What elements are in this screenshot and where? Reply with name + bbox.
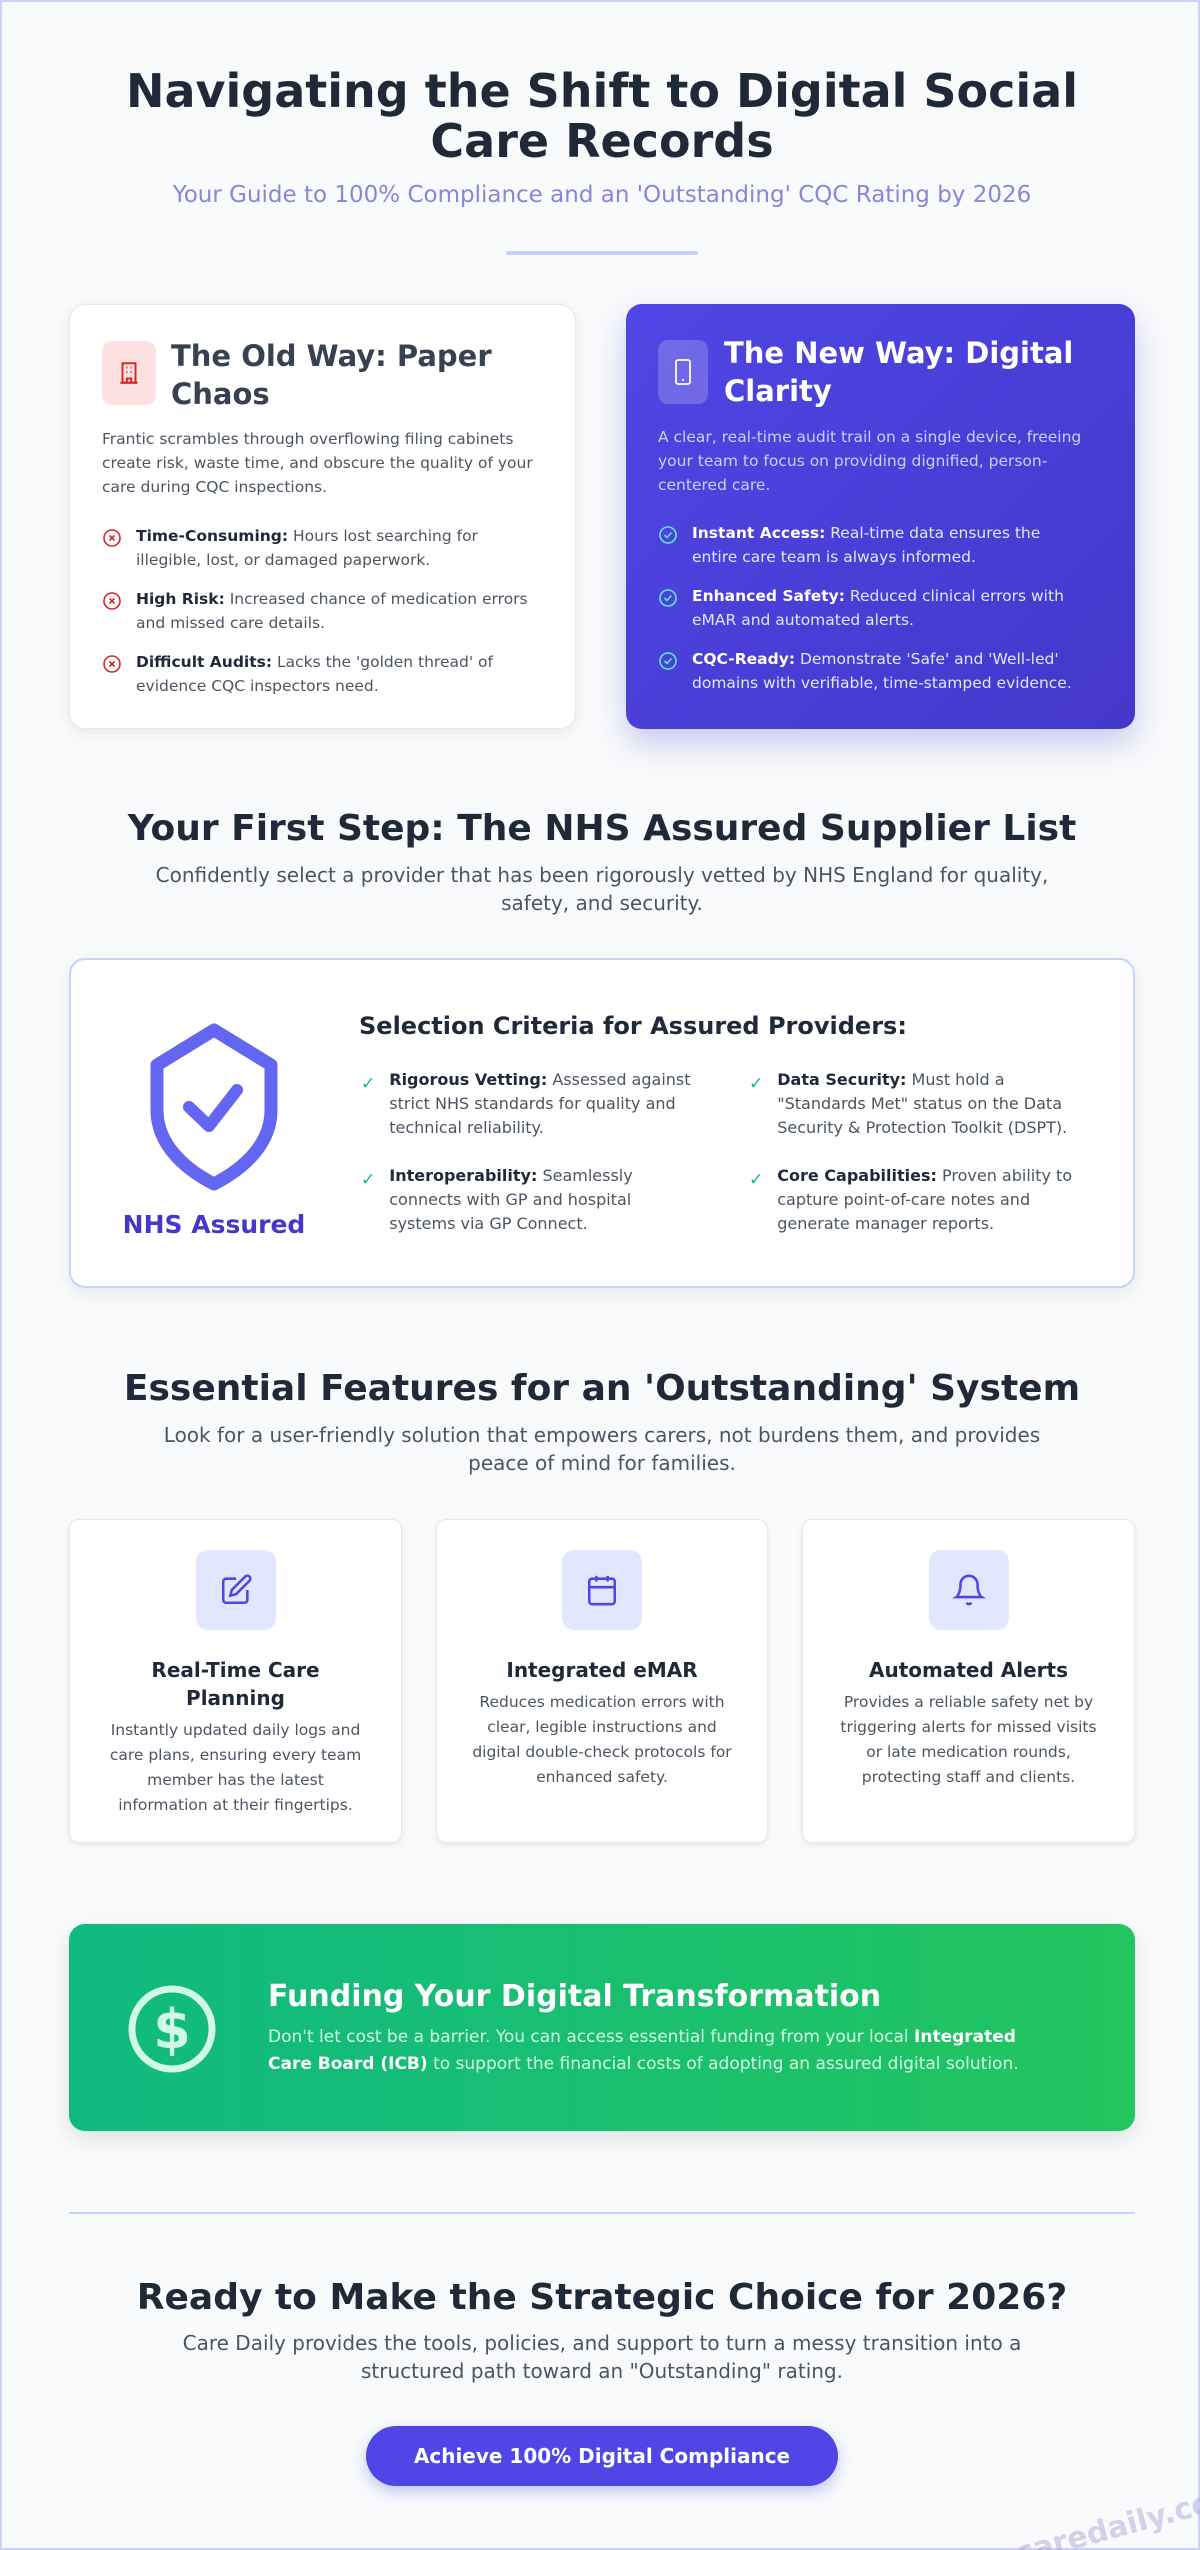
criteria grid: Rigorous Vetting: Assessed against strict NHS standards for quality and technical reliability. <box>389 1070 691 1137</box>
text: first step subtitle: Confidently select a provider that has been rigorously vetted by NHS England for quality, safety, and security. <box>156 863 1048 915</box>
list: old way problems: High Risk: Increased chance of medication errors and missed care details. <box>136 590 528 632</box>
icon: building <box>102 341 156 405</box>
criteria grid: Data Security: Must hold a "Standards Met" status on the Data Security & Protection Toolkit (DSPT). <box>777 1070 1067 1137</box>
text: old way description: Frantic scrambles through overflowing filing cabinets create risk, waste time, and obscure the quality of your care during CQC inspections. <box>102 430 533 496</box>
criteria grid <box>361 1070 1072 1233</box>
heading: old way: The Old Way: Paper Chaos <box>171 339 492 411</box>
feature card: automated alerts: Automated Alerts <box>869 1658 1068 1682</box>
list: old way problems: Difficult Audits: Lacks the 'golden thread' of <box>136 653 493 671</box>
subtitle: Your Guide to 100% Compliance and an 'Outstanding' CQC Rating by 2026 <box>173 182 1031 208</box>
heading: essential features: Essential Features for an 'Outstanding' System <box>124 1368 1080 1409</box>
icon: dollar: $ <box>153 1998 191 2061</box>
criteria grid: ✓ <box>361 1170 375 1190</box>
button: cta: Achieve 100% Digital Compliance <box>414 2444 790 2468</box>
panel: new way <box>626 304 1135 729</box>
list: new way benefits <box>659 524 1072 692</box>
text: funding: Don't let cost be a barrier. You can access essential funding from your local Integrated <box>268 2027 1016 2047</box>
heading: funding: Funding Your Digital Transformation <box>268 1979 881 2014</box>
text: funding: Care Board (ICB) to support the financial costs of adopting an assured digital solution. <box>268 2054 1019 2074</box>
feature card: automated alerts: Provides a reliable safety net by triggering alerts for missed visits or late medication rounds, protecting staff and clients. <box>840 1693 1097 1786</box>
text: features subtitle: Look for a user-friendly solution that empowers carers, not burdens them, and provides peace of mind for families. <box>164 1423 1040 1475</box>
icon: shield <box>150 1023 278 1190</box>
panel: old way <box>69 304 576 729</box>
label: NHS Assured: NHS Assured <box>123 1210 305 1239</box>
criteria grid: ✓ <box>749 1170 763 1190</box>
criteria grid: Core Capabilities: Proven ability to capture point-of-care notes and generate manager reports. <box>777 1166 1072 1233</box>
text: new way description: A clear, real-time audit trail on a single device, freeing your team to focus on providing dignified, person-centered care. <box>658 428 1081 494</box>
list: new way benefits: eMAR and automated alerts. <box>692 611 914 629</box>
text: cta description: Care Daily provides the tools, policies, and support to turn a messy transition into a structured path toward an "Outstanding" rating. <box>183 2331 1021 2383</box>
feature card: real-time care planning <box>69 1519 402 1843</box>
feature card: integrated eMAR: Reduces medication errors with clear, legible instructions and digital double-check protocols for enhanced safety. <box>472 1693 732 1786</box>
feature card: real-time care planning: Real-Time Care Planning <box>151 1658 320 1710</box>
list: old way problems: illegible, lost, or damaged paperwork. <box>136 551 430 569</box>
title: Navigating the Shift to Digital Social Care Records <box>126 64 1078 168</box>
criteria grid: ✓ <box>361 1074 375 1094</box>
heading: selection criteria: Selection Criteria for Assured Providers: <box>359 1012 907 1040</box>
feature card: integrated eMAR <box>436 1519 768 1843</box>
list: new way benefits: Instant Access: Real-time data ensures the <box>692 524 1040 542</box>
list: new way benefits: entire care team is always informed. <box>692 548 976 566</box>
icon: dollar <box>128 1986 216 2072</box>
feature card: automated alerts <box>802 1519 1135 1843</box>
icon: phone <box>658 340 708 404</box>
panel: NHS assured <box>69 958 1135 1288</box>
heading: first step: Your First Step: The NHS Assured Supplier List <box>128 808 1076 849</box>
criteria grid: Interoperability: Seamlessly connects with GP and hospital systems via GP Connect. <box>389 1166 633 1233</box>
list: new way benefits: domains with verifiable, time-stamped evidence. <box>692 674 1072 692</box>
panel: funding banner <box>69 1924 1135 2131</box>
heading: call to action: Ready to Make the Strategic Choice for 2026? <box>137 2277 1067 2318</box>
feature card: integrated eMAR: Integrated eMAR <box>506 1658 698 1682</box>
list: old way problems: Time-Consuming: Hours lost searching for <box>136 527 478 545</box>
list: old way problems: evidence CQC inspectors need. <box>136 677 379 695</box>
feature card: real-time care planning: Instantly updated daily logs and care plans, ensuring every team member has the latest information at their fingertips. <box>110 1721 361 1814</box>
list: new way benefits: Enhanced Safety: Reduced clinical errors with <box>692 587 1064 605</box>
button: cta <box>366 2426 838 2486</box>
list: old way problems <box>103 527 528 695</box>
list: new way benefits: CQC-Ready: Demonstrate 'Safe' and 'Well-led' <box>692 650 1059 668</box>
text: funding <box>268 2027 1019 2074</box>
criteria grid: ✓ <box>749 1074 763 1094</box>
heading: new way: The New Way: Digital Clarity <box>724 336 1073 408</box>
